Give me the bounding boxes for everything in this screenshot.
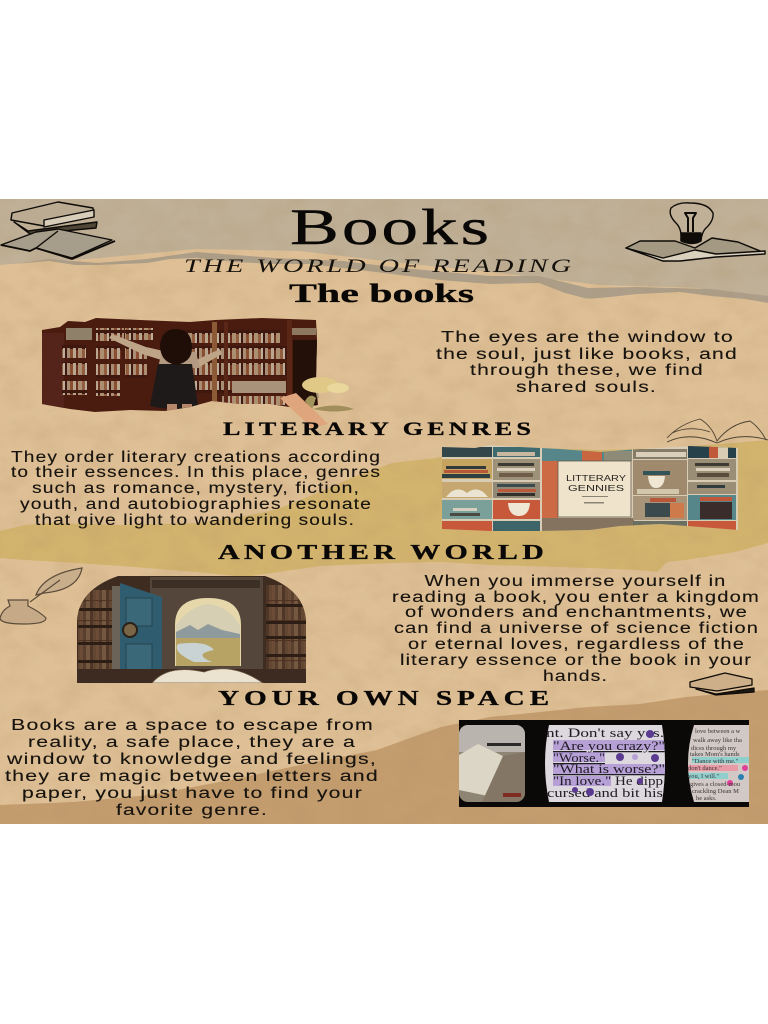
- image: filmstrip of book pages: takes Mom's hands: [690, 751, 740, 758]
- text block: another world: [392, 573, 760, 685]
- heading: literary genres: LITERARY GENRES: [223, 419, 535, 440]
- text block: another world: can find a universe of science fiction: [394, 620, 759, 637]
- panel: torn paper poster background: [0, 199, 768, 824]
- image: filmstrip of book pages: nt. Don't say yes.: [546, 726, 664, 740]
- icon: quill and inkwell: [0, 568, 82, 624]
- text block: the eyes: shared souls.: [516, 379, 657, 396]
- image: filmstrip of book pages: walk away like tha: [693, 737, 742, 744]
- text block: genres: to their essences. In this place, genres: [11, 464, 381, 481]
- text block: another world: hands.: [543, 668, 608, 685]
- image: filmstrip of book pages: "Dance with me.": [692, 758, 739, 765]
- text block: another world: of wonders and enchantments, we: [405, 604, 748, 621]
- image: filmstrip of book pages: he asks.: [696, 795, 717, 802]
- text block: another world: reading a book, you enter a kingdom: [392, 589, 760, 606]
- text block: the eyes: through these, we find: [470, 362, 704, 379]
- heading: The books: The books: [289, 279, 474, 308]
- text block: the eyes: [436, 329, 738, 396]
- text block: your own space: favorite genre.: [116, 802, 268, 819]
- text block: your own space: Books are a space to escape from: [11, 717, 374, 734]
- text block: another world: When you immerse yourself in: [424, 573, 726, 590]
- text block: genres: They order literary creations according: [11, 449, 381, 466]
- image: filmstrip of book pages: dices through my: [691, 745, 737, 752]
- icon: outline open book: [667, 419, 768, 443]
- image: filmstrip of book pages: "Worse.": [553, 751, 605, 765]
- image: filmstrip of book pages: "In love." He dipp: [553, 774, 663, 788]
- image: filmstrip of book pages: gives a closed-mou: [690, 781, 741, 788]
- text block: genres: youth, and autobiographies resonate: [20, 496, 372, 513]
- image: filmstrip of book pages: "Are you crazy?": [553, 739, 665, 753]
- subtitle: THE WORLD OF READING: [184, 256, 574, 277]
- text block: another world: literary essence or the book in your: [400, 652, 752, 669]
- text block: your own space: reality, a safe place, they are a: [28, 734, 356, 751]
- text block: the eyes: The eyes are the window to: [441, 329, 734, 346]
- text block: your own space: they are magic between letters and: [5, 768, 379, 785]
- text block: the eyes: the soul, just like books, and: [436, 346, 738, 363]
- icon: light bulb on open book: [626, 203, 765, 261]
- heading: another world: ANOTHER WORLD: [218, 540, 548, 564]
- text block: genres: such as romance, mystery, fiction,: [32, 480, 360, 497]
- image: woman at library shelves: [40, 316, 320, 416]
- image: illustrated bookshelf with cover: [436, 444, 740, 534]
- heading: your own space: YOUR OWN SPACE: [218, 686, 554, 710]
- image: illustrated bookshelf with cover: GENNIES: [568, 483, 624, 493]
- image: filmstrip of book pages: you, I will.": [688, 773, 720, 780]
- icon: pressed flower and tape: [280, 377, 354, 428]
- text block: another world: or eternal loves, regardless of the: [408, 636, 745, 653]
- text block: genres: that give light to wandering souls.: [35, 512, 355, 529]
- text block: genres: [11, 449, 381, 529]
- image: open door in library: [76, 574, 308, 684]
- title: Books: [290, 200, 492, 256]
- image: filmstrip of book pages: cursed and bit his: [547, 786, 663, 800]
- text block: your own space: window to knowledge and feelings,: [6, 751, 377, 768]
- icon: stacked and open books: [1, 202, 115, 259]
- image: filmstrip of book pages: crackling Dean M: [692, 788, 739, 795]
- text block: your own space: [5, 717, 379, 819]
- icon: small stacked books: [690, 673, 754, 695]
- image: filmstrip of book pages: "What is worse?": [553, 762, 665, 776]
- image: illustrated bookshelf with cover: LITTERARY: [566, 473, 626, 483]
- image: filmstrip of book pages: don't dance.": [688, 765, 722, 772]
- image: filmstrip of book pages: [459, 720, 750, 807]
- text block: your own space: paper, you just have to find your: [22, 785, 363, 802]
- image: filmstrip of book pages: love between a w: [695, 728, 741, 735]
